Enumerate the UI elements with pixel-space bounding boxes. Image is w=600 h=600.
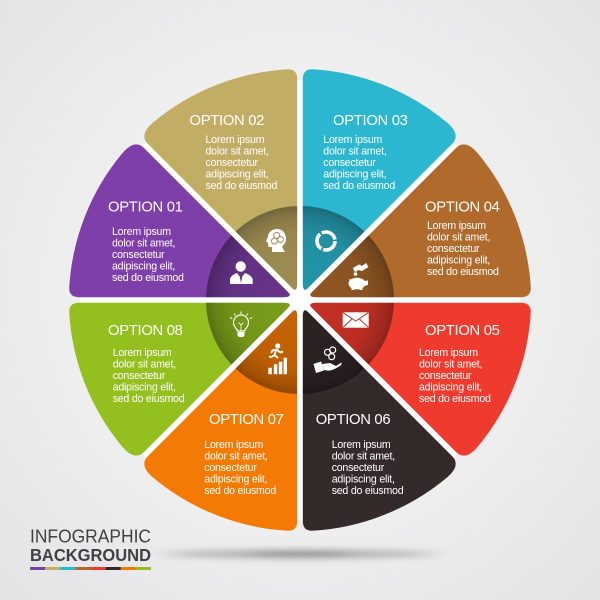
- text: option 06: Lorem ipsum: [332, 439, 391, 451]
- text: option 01: adipiscing elit,: [112, 260, 175, 272]
- icon: cycle arrows: [317, 232, 335, 250]
- wedge: option 05: [310, 302, 531, 456]
- text: option 05: dolor sit amet,: [419, 358, 482, 370]
- text: option 02: sed do eiusmod: [206, 180, 278, 192]
- text: option 01: Lorem ipsum: [112, 226, 171, 238]
- text: option 05: sed do eiusmod: [419, 393, 491, 405]
- text: option 05: consectetur: [419, 370, 472, 382]
- text: option 06: consectetur: [332, 462, 385, 474]
- text: option 07: dolor sit amet,: [204, 450, 268, 462]
- icon: head with gears: [266, 229, 286, 252]
- heading: option 08: OPTION 08: [108, 323, 183, 339]
- ground shadow: [165, 550, 435, 558]
- text: option 05: Lorem ipsum: [419, 347, 478, 359]
- text: option 04: consectetur: [427, 243, 480, 255]
- text: option 05: adipiscing elit,: [419, 382, 482, 394]
- icon: businessman: [230, 261, 253, 284]
- title line 2: BACKGROUND: [30, 545, 151, 565]
- text: option 08: sed do eiusmod: [113, 393, 185, 405]
- text: option 06: sed do eiusmod: [332, 485, 404, 497]
- text: option 07: adipiscing elit,: [204, 474, 267, 486]
- wedge: option 02: [144, 69, 298, 290]
- text: option 03: adipiscing elit,: [323, 168, 386, 180]
- panel: option 04: [310, 144, 531, 298]
- wedge: option 04: [310, 144, 531, 298]
- text: option 03: consectetur: [323, 157, 376, 169]
- panel: option 01: [69, 144, 290, 298]
- text: option 08: adipiscing elit,: [113, 382, 176, 394]
- panel: option 03: [302, 69, 456, 290]
- text: option 06: dolor sit amet,: [332, 450, 395, 462]
- panel: option 05: [310, 302, 531, 456]
- text: option 01: consectetur: [112, 249, 165, 261]
- text: option 07: consectetur: [204, 462, 257, 474]
- icon: envelope: [343, 312, 369, 328]
- text: option 04: Lorem ipsum: [427, 220, 486, 232]
- colour strip: [30, 567, 151, 570]
- heading: option 04: OPTION 04: [425, 200, 500, 216]
- text: option 04: sed do eiusmod: [427, 266, 499, 278]
- heading: option 01: OPTION 01: [108, 200, 183, 216]
- heading: option 06: OPTION 06: [316, 412, 390, 428]
- wedge: option 01: [69, 144, 290, 298]
- panel: option 06: [302, 310, 456, 531]
- heading: option 05: OPTION 05: [425, 323, 500, 339]
- wedge: option 07: [144, 310, 298, 531]
- text: option 02: consectetur: [206, 157, 259, 169]
- text: option 02: Lorem ipsum: [206, 134, 265, 146]
- text: option 03: Lorem ipsum: [323, 134, 383, 146]
- icon: runner and bars: [268, 343, 287, 374]
- text: option 08: Lorem ipsum: [113, 347, 172, 359]
- text: option 03: dolor sit amet,: [323, 146, 387, 158]
- wedge: option 08: [69, 302, 290, 456]
- text: option 08: dolor sit amet,: [113, 358, 176, 370]
- text: option 07: Lorem ipsum: [204, 439, 264, 451]
- text: option 07: sed do eiusmod: [204, 485, 276, 497]
- text: option 06: adipiscing elit,: [332, 474, 395, 486]
- text: option 01: dolor sit amet,: [112, 238, 175, 250]
- icon: hand with gears: [314, 347, 342, 373]
- title line 1: INFOGRAPHIC: [30, 526, 151, 547]
- text: option 02: dolor sit amet,: [206, 146, 269, 158]
- panel: option 07: [144, 310, 298, 531]
- wedge: option 06: [302, 310, 456, 531]
- icon: piggy bank: [348, 263, 368, 290]
- text: option 04: adipiscing elit,: [427, 254, 490, 266]
- text: option 02: adipiscing elit,: [206, 168, 269, 180]
- wedge: option 03: [302, 69, 456, 290]
- heading: option 02: OPTION 02: [190, 113, 264, 129]
- icon: light bulb: [230, 312, 252, 337]
- text: option 08: consectetur: [113, 370, 166, 382]
- heading: option 03: OPTION 03: [333, 113, 408, 129]
- panel: option 08: [69, 302, 290, 456]
- text: option 04: dolor sit amet,: [427, 232, 490, 244]
- panel: option 02: [144, 69, 298, 290]
- text: option 03: sed do eiusmod: [323, 180, 395, 192]
- title: [30, 526, 151, 570]
- text: option 01: sed do eiusmod: [112, 272, 184, 284]
- heading: option 07: OPTION 07: [209, 412, 284, 428]
